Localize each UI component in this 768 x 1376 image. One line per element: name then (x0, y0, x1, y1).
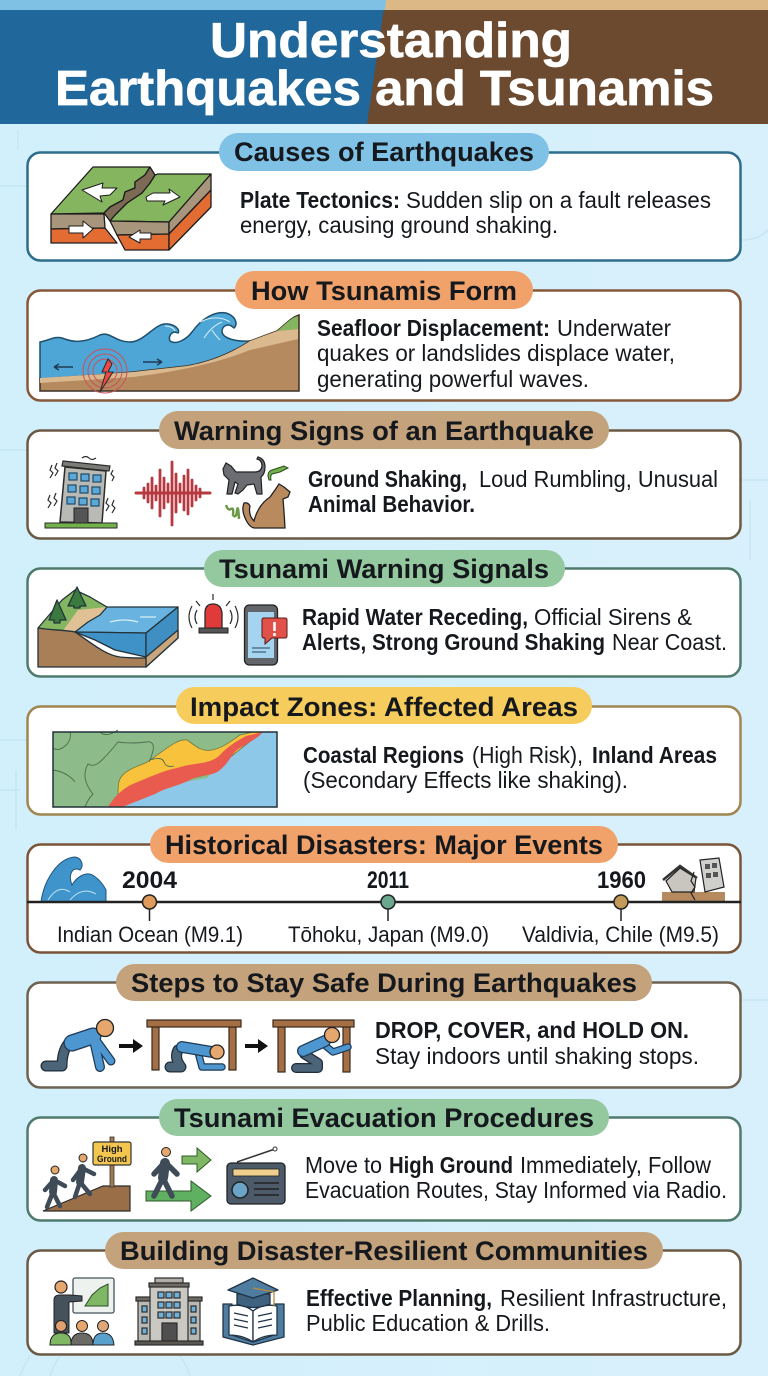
text: drop cover hold (375, 1017, 699, 1069)
icon: seismic waveform (136, 462, 210, 525)
title (55, 14, 714, 116)
event: 1960: Valdivia, Chile (M9.5) (522, 922, 719, 947)
text: evacuation: Immediately, Follow (520, 1152, 712, 1178)
panel: impact zones (28, 687, 740, 814)
text: signals: Rapid Water Receding, (302, 604, 528, 630)
panel: resilient communities (28, 1232, 740, 1354)
heading: warning signs: Warning Signs of an Earthquake (174, 416, 594, 446)
heading: steps: Steps to Stay Safe During Earthquakes (131, 968, 637, 998)
event: 1960: 1960 (597, 867, 646, 894)
text: evacuation (305, 1152, 727, 1203)
icon: tsunami wave (41, 857, 106, 902)
event: 2011 (288, 867, 489, 947)
timeline axis (27, 895, 741, 921)
text: drop cover hold: DROP, COVER, and HOLD ON. (375, 1017, 689, 1043)
text: plate tectonics: energy, causing ground shaking. (240, 212, 558, 238)
icon: radio (227, 1147, 285, 1204)
text: warning signs: Ground Shaking, (308, 466, 467, 492)
text: communities (306, 1285, 727, 1336)
icon: drop (46, 1020, 114, 1067)
text: signals: Alerts, Strong Ground Shaking (302, 629, 605, 655)
panel: tsunami warning signals (28, 550, 740, 676)
event: 2004: Indian Ocean (M9.1) (57, 922, 243, 947)
heading: historical disasters: Historical Disasters: Major Events (165, 830, 603, 860)
text: impact zones: (High Risk), (472, 742, 583, 768)
text: evacuation: Move to (305, 1152, 382, 1178)
icon: gray cat (223, 457, 265, 494)
title: Understanding (210, 14, 572, 68)
text: evacuation: Evacuation Routes, Stay Informed via Radio. (305, 1177, 727, 1203)
header banner (0, 0, 768, 124)
text: communities: Effective Planning, (306, 1285, 492, 1311)
text: signals: Official Sirens & (534, 604, 692, 630)
title: Earthquakes and Tsunamis (55, 62, 714, 116)
panel: how tsunamis form (28, 271, 740, 400)
text: warning signs: Loud Rumbling, Unusual (479, 466, 718, 492)
arrow: cover to hold (245, 1039, 268, 1053)
text: impact zones: (Secondary Effects like shaking). (303, 767, 628, 793)
panel: historical disasters timeline (27, 826, 741, 952)
heading: tsunamis form: How Tsunamis Form (251, 276, 517, 306)
text: signals: Near Coast. (612, 629, 727, 655)
icon: siren (189, 594, 238, 633)
text: plate tectonics (240, 187, 711, 238)
text: communities: Public Education & Drills. (306, 1310, 550, 1336)
text: seafloor displacement: generating powerful waves. (317, 366, 589, 392)
icon: evacuation routes (146, 1148, 211, 1211)
illustration: receding coast block (38, 587, 178, 667)
text: plate tectonics: Sudden slip on a fault releases (406, 187, 711, 213)
heading: evacuation: Tsunami Evacuation Procedures (174, 1103, 594, 1133)
icon: damaged buildings (662, 858, 725, 902)
text: seafloor displacement: Seafloor Displacement: (317, 315, 550, 341)
icon: high ground sign and hill: High (102, 1144, 123, 1155)
heading: communities: Building Disaster-Resilient Communities (120, 1236, 648, 1266)
text: signals (302, 604, 727, 655)
heading: tsunamis form (235, 271, 533, 309)
event: 2004: 2004 (122, 867, 178, 894)
text: evacuation: High Ground (389, 1152, 513, 1178)
icon: hold on (273, 1020, 354, 1072)
text: communities: Resilient Infrastructure, (500, 1285, 727, 1311)
text: warning signs (308, 466, 718, 517)
map: affected coast (53, 730, 277, 807)
heading: impact zones: Impact Zones: Affected Areas (190, 692, 578, 722)
icon: lizard (268, 466, 288, 480)
event: 2011: 2011 (367, 867, 409, 894)
icon: high ground sign and hill (43, 1137, 131, 1211)
panel: tsunami evacuation (28, 1099, 740, 1220)
icon: resilient building (135, 1278, 203, 1345)
text: impact zones (303, 742, 717, 793)
icon: fault block (51, 167, 211, 250)
icon: teacher with audience (50, 1278, 114, 1345)
event: 1960 (522, 867, 719, 947)
illustration: tsunami wave cross-section (40, 313, 299, 393)
text: seafloor displacement: Underwater (557, 315, 671, 341)
panel: causes of earthquakes (28, 133, 740, 260)
text: plate tectonics: Plate Tectonics: (240, 187, 400, 213)
text: seafloor displacement: quakes or landslides displace water, (317, 340, 675, 366)
icon: cover under table (147, 1020, 241, 1070)
icon: shaking building (45, 456, 117, 528)
icon: orange cat (243, 484, 290, 528)
text: drop cover hold: Stay indoors until shaking stops. (375, 1043, 699, 1069)
icon: snake (226, 505, 239, 519)
event: 2011: Tōhoku, Japan (M9.0) (288, 922, 489, 947)
text: impact zones: Coastal Regions (303, 742, 464, 768)
event: 2004 (57, 867, 243, 947)
panel: warning signs (28, 411, 740, 538)
arrow: drop to cover (119, 1039, 143, 1053)
text: warning signs: Animal Behavior. (308, 491, 475, 517)
heading: causes: Causes of Earthquakes (234, 137, 534, 167)
text: impact zones: Inland Areas (592, 742, 717, 768)
heading: signals: Tsunami Warning Signals (219, 554, 549, 584)
icon: high ground sign and hill: Ground (97, 1154, 127, 1165)
text: seafloor displacement (317, 315, 675, 392)
icon: book and graduation cap (223, 1278, 284, 1345)
icon: phone alert (244, 605, 287, 665)
panel: steps to stay safe (28, 964, 740, 1088)
